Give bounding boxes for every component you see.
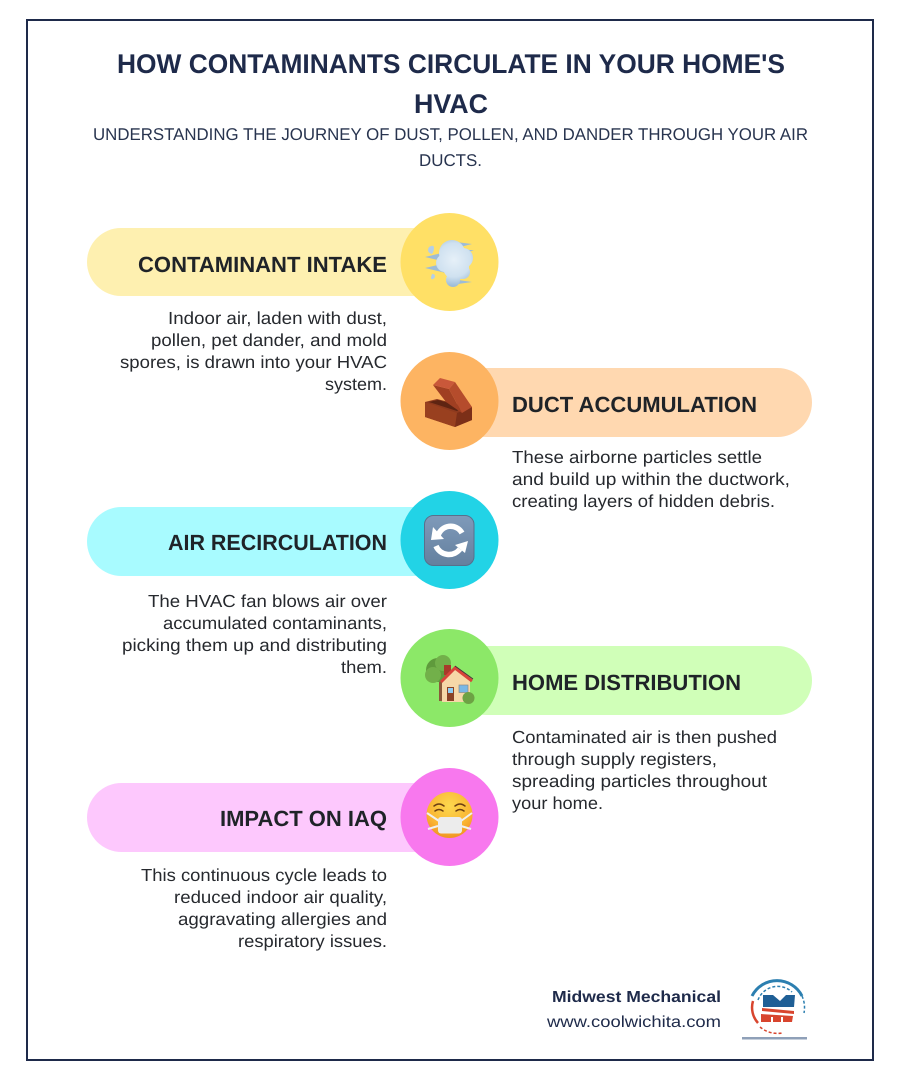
- heading pill: home distribution: [452, 646, 812, 715]
- description: [512, 447, 790, 511]
- description: spores, is drawn into your HVAC: [120, 352, 387, 372]
- description: respiratory issues.: [238, 931, 387, 951]
- step 2: duct accumulation: [400, 352, 812, 511]
- description: them.: [341, 657, 387, 677]
- description: through supply registers,: [512, 749, 717, 769]
- heading pill: impact on IAQ: IMPACT ON IAQ: [220, 806, 387, 831]
- icon: house with tree: [400, 629, 498, 727]
- footer brand: Midwest Mechanical: [552, 989, 721, 1006]
- icon: brick: [400, 352, 498, 450]
- description: creating layers of hidden debris.: [512, 491, 775, 511]
- heading pill: air recirculation: AIR RECIRCULATION: [168, 530, 387, 555]
- title: HVAC: [414, 89, 488, 119]
- subtitle: DUCTS.: [419, 151, 482, 170]
- description: [120, 308, 387, 394]
- footer brand: [546, 989, 721, 1031]
- description: pollen, pet dander, and mold: [151, 330, 387, 350]
- description: and build up within the ductwork,: [512, 469, 790, 489]
- description: Indoor air, laden with dust,: [168, 308, 387, 328]
- heading pill: impact on IAQ: [87, 783, 447, 852]
- description: [141, 865, 387, 951]
- description: aggravating allergies and: [178, 909, 387, 929]
- description: [512, 727, 777, 813]
- logo: [742, 981, 807, 1040]
- subtitle: [93, 125, 808, 170]
- description: spreading particles throughout: [512, 771, 767, 791]
- title: HOW CONTAMINANTS CIRCULATE IN YOUR HOME'S: [117, 49, 785, 79]
- description: system.: [325, 374, 387, 394]
- heading pill: duct accumulation: [452, 368, 812, 437]
- description: accumulated contaminants,: [163, 613, 387, 633]
- description: [122, 591, 387, 677]
- step 3: air recirculation: [87, 491, 498, 677]
- description: These airborne particles settle: [512, 447, 762, 467]
- description: picking them up and distributing: [122, 635, 387, 655]
- description: Contaminated air is then pushed: [512, 727, 777, 747]
- subtitle: UNDERSTANDING THE JOURNEY OF DUST, POLLEN, AND DANDER THROUGH YOUR AIR: [93, 125, 808, 144]
- description: your home.: [512, 793, 603, 813]
- description: This continuous cycle leads to: [141, 865, 387, 885]
- description: The HVAC fan blows air over: [148, 591, 387, 611]
- step 4: home distribution: [400, 629, 812, 813]
- heading pill: duct accumulation: DUCT ACCUMULATION: [512, 392, 757, 417]
- icon: wind cloud: [400, 213, 498, 311]
- icon: face with medical mask: [400, 768, 498, 866]
- icon: recirculation arrows: [400, 491, 498, 589]
- title: [117, 49, 785, 119]
- heading pill: contaminant intake: [87, 228, 447, 296]
- heading pill: home distribution: HOME DISTRIBUTION: [512, 670, 741, 695]
- heading pill: air recirculation: [87, 507, 447, 576]
- step 5: impact on IAQ: [87, 768, 498, 951]
- step 1: contaminant intake: [87, 213, 498, 394]
- heading pill: contaminant intake: CONTAMINANT INTAKE: [138, 252, 387, 277]
- footer brand: www.coolwichita.com: [546, 1014, 721, 1031]
- description: reduced indoor air quality,: [174, 887, 387, 907]
